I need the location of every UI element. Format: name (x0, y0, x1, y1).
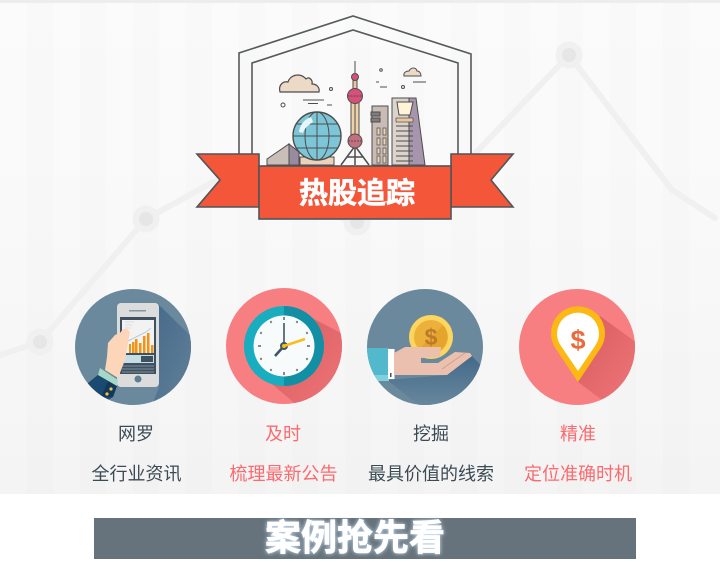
panel: 精准 (519, 289, 637, 484)
text: 最具价值的线索: 最具价值的线索 (368, 464, 494, 484)
ribbon right tail (451, 154, 513, 207)
icon: phone in hand (75, 289, 195, 410)
ribbon centre (259, 166, 451, 219)
label: 挖掘: 挖掘 (413, 424, 449, 444)
icon: skyscraper (392, 98, 425, 165)
icon: small cloud (404, 68, 421, 76)
ribbon banner (197, 154, 513, 219)
badge: house outline (239, 16, 471, 156)
text: 定位准确时机: 定位准确时机 (524, 464, 632, 484)
text: 全行业资讯: 全行业资讯 (92, 464, 182, 484)
icon: map pin with dollar (519, 289, 637, 405)
label: 精准: 精准 (560, 424, 596, 444)
illustration: Shanghai skyline (267, 61, 426, 165)
left low building (267, 144, 289, 165)
sky details (281, 69, 426, 107)
icon: globe (293, 112, 341, 160)
text: 梳理最新公告: 梳理最新公告 (230, 464, 338, 484)
icon: tower block (371, 106, 388, 165)
icon: Oriental Pearl tower (341, 61, 369, 165)
icon: large cloud (280, 75, 319, 92)
heading: 案例抢先看: 案例抢先看 (265, 517, 445, 558)
label: 及时: 及时 (265, 424, 301, 444)
globe base (300, 157, 334, 165)
panel: 挖掘 (365, 289, 494, 484)
panel: 及时 (226, 288, 345, 484)
label: 网罗: 网罗 (118, 424, 154, 444)
panel: 网罗 (75, 289, 195, 484)
section banner (94, 517, 636, 559)
icon: hand holding coin: $ (425, 324, 438, 350)
background line chart (0, 42, 715, 356)
icon: map pin with dollar: $ (570, 325, 586, 355)
ribbon left tail (197, 154, 259, 207)
icon: clock (226, 288, 345, 412)
heading: 热股追踪: 热股追踪 (299, 177, 415, 210)
icon: hand holding coin (367, 289, 483, 405)
